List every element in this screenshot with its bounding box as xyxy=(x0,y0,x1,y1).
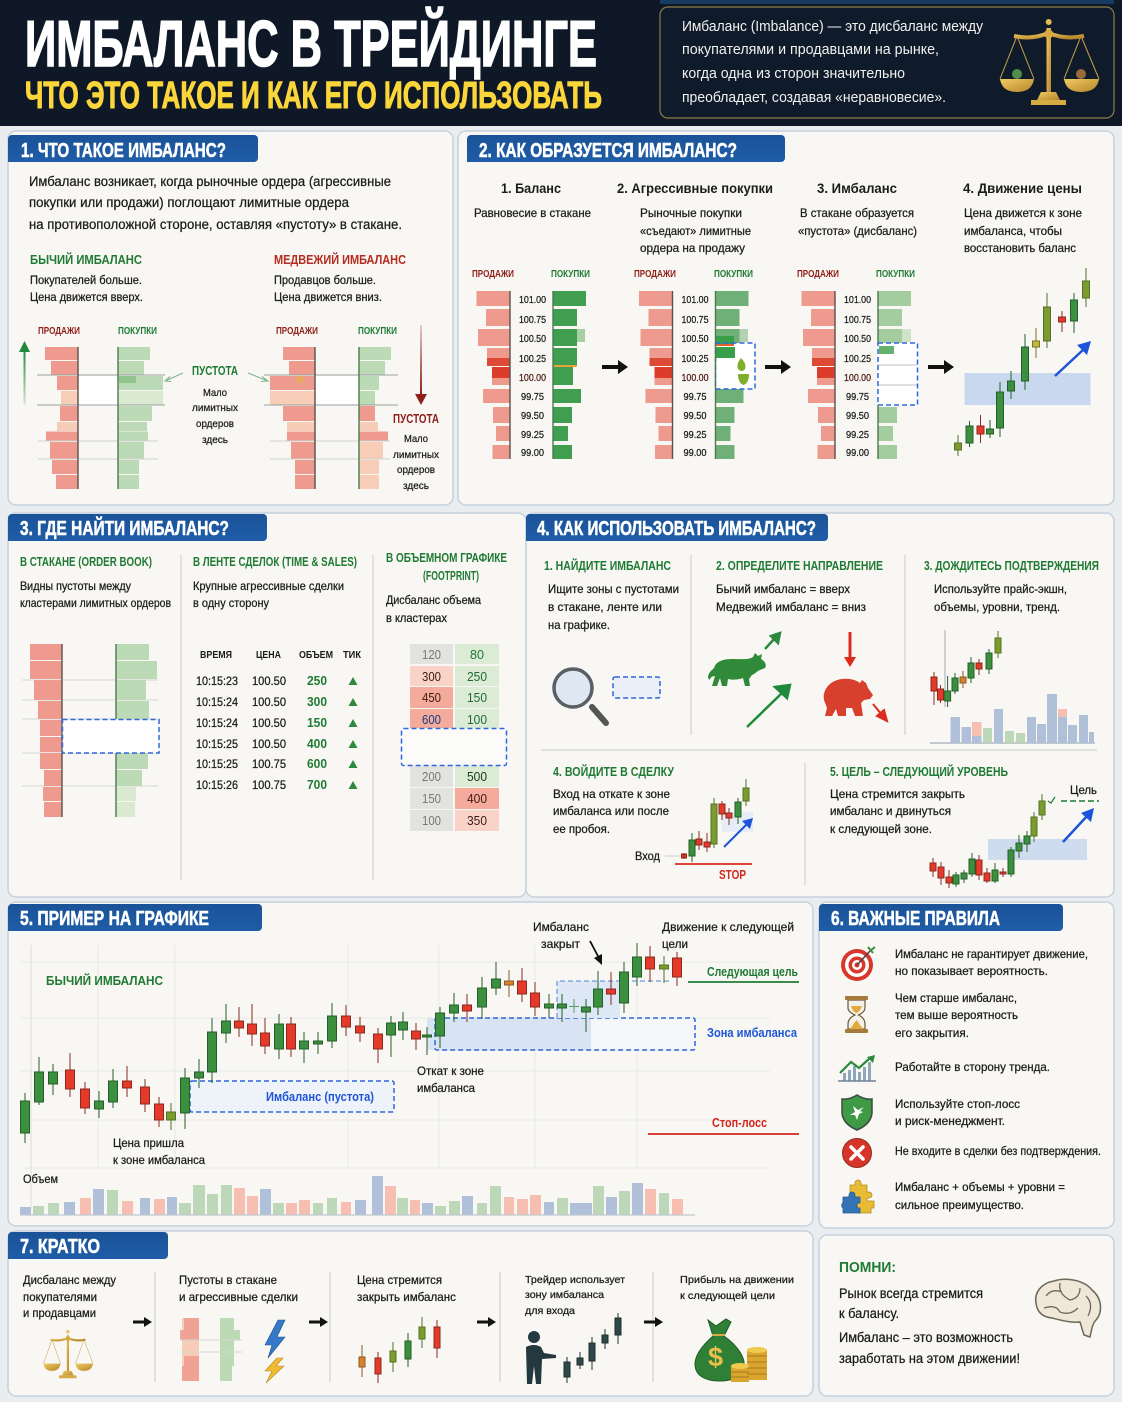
arrow xyxy=(765,360,791,374)
annotation: closed xyxy=(533,920,602,965)
rule 2: тем выше вероятность xyxy=(895,1008,1018,1022)
ladder 2: aggressive buys: 99.25 xyxy=(684,429,707,441)
arrow xyxy=(477,1317,496,1327)
title: ИМБАЛАНС В ТРЕЙДИНГЕ xyxy=(25,7,597,80)
footprint table: 300 xyxy=(422,670,441,684)
mini order book xyxy=(180,1318,242,1381)
footprint table: 100 xyxy=(467,713,487,727)
column 2 text: Крупные агрессивные сделки xyxy=(193,579,344,593)
column 2 text: В ЛЕНТЕ СДЕЛОК (TIME & SALES) xyxy=(193,555,357,569)
arrow xyxy=(133,1317,152,1327)
step 4 enter: Вход на откате к зоне xyxy=(553,787,670,801)
step 2 text: Рыночные покупки xyxy=(640,206,742,220)
void label green xyxy=(165,364,268,446)
step 2 direction xyxy=(708,559,887,727)
void label red: здесь xyxy=(403,480,429,492)
step 3 text: «пустота» (дисбаланс) xyxy=(798,224,917,238)
annotation: price reached zone: Цена пришла xyxy=(113,1136,184,1150)
ladder 3: imbalance: 101.00 xyxy=(844,294,871,306)
void label green: Мало xyxy=(203,387,227,399)
summary 3 xyxy=(357,1273,456,1383)
step 4 enter: 4. ВОЙДИТЕ В СДЕЛКУ xyxy=(553,764,674,779)
footprint table: 350 xyxy=(467,814,487,828)
summary 2: Пустоты в стакане xyxy=(179,1273,277,1287)
step 4 enter: Вход xyxy=(635,849,660,863)
summary 4: зону имбаланса xyxy=(525,1289,604,1301)
column 3 text: В ОБЪЕМНОМ ГРАФИКЕ xyxy=(386,551,507,565)
arrow xyxy=(309,1317,328,1327)
step 1 text: 1. Баланс xyxy=(501,181,561,196)
arrow down xyxy=(415,325,427,405)
void label red xyxy=(393,412,440,492)
ladder 3: imbalance: 99.75 xyxy=(846,391,869,403)
summary 1 xyxy=(23,1273,116,1378)
ladder 2: aggressive buys: 101.00 xyxy=(682,294,709,306)
annotation: move to next target: цели xyxy=(662,937,688,951)
icon: puzzle xyxy=(842,1180,874,1213)
time and sales table: ТИК xyxy=(343,650,362,661)
step 4 text: имбаланса, чтобы xyxy=(964,224,1062,238)
step 2 text: 2. Агрессивные покупки xyxy=(617,181,773,196)
summary 5 xyxy=(680,1274,794,1382)
imbalance void zone: Имбаланс (пустота) xyxy=(266,1090,374,1104)
ladder 3: imbalance: 100.75 xyxy=(844,314,871,326)
mini candles xyxy=(359,1317,440,1383)
time and sales table: ЦЕНА xyxy=(256,650,281,661)
heading 5: 5. ПРИМЕР НА ГРАФИКЕ xyxy=(20,908,209,930)
bullish imbalance text xyxy=(30,252,143,304)
time and sales table: 100.50 xyxy=(252,674,286,688)
step 2 direction: 2. ОПРЕДЕЛИТЕ НАПРАВЛЕНИЕ xyxy=(716,559,883,573)
icon: target xyxy=(841,947,875,981)
rule 4: Используйте стоп-лосс xyxy=(895,1097,1020,1111)
bearish order book xyxy=(264,326,398,489)
time and sales table: 100.75 xyxy=(252,757,286,771)
step 1 text xyxy=(474,181,591,220)
icon: trend chart xyxy=(838,1055,876,1081)
step 5 target: 5. ЦЕЛЬ – СЛЕДУЮЩИЙ УРОВЕНЬ xyxy=(830,764,1008,779)
annotation: closed: Имбаланс xyxy=(533,920,589,934)
summary 1: Дисбаланс между xyxy=(23,1273,116,1287)
ladder 2: aggressive buys: ПРОДАЖИ xyxy=(634,269,676,280)
footprint table xyxy=(402,644,506,831)
footprint table: 120 xyxy=(422,648,441,662)
icon: cross xyxy=(842,1138,872,1168)
entry chart xyxy=(665,779,753,864)
summary 5: Прибыль на движении xyxy=(680,1274,794,1286)
step 1 find: в стакане, ленте или xyxy=(548,600,662,614)
ladder 1: balance: 100.50 xyxy=(519,333,546,345)
summary 3: закрыть имбаланс xyxy=(357,1290,456,1304)
rule 5 xyxy=(842,1138,1101,1168)
remember text xyxy=(839,1286,1020,1366)
time and sales table: 10:15:24 xyxy=(196,695,238,709)
footprint table: 100 xyxy=(422,814,441,828)
annotation: closed: закрыт xyxy=(541,937,581,951)
stop loss: Стоп-лосс xyxy=(712,1116,767,1130)
step 3 text xyxy=(798,181,917,238)
rule 3 xyxy=(838,1055,1050,1081)
ladder 1: balance: ПОКУПКИ xyxy=(551,269,590,280)
ladder 3: imbalance: 99.25 xyxy=(846,429,869,441)
icon: golden scales xyxy=(1000,19,1099,105)
step 4 enter: ее пробоя. xyxy=(553,822,610,836)
summary 4: Трейдер использует xyxy=(525,1274,625,1286)
step 3 confirmation: Используйте прайс-экшн, xyxy=(934,582,1067,596)
intro text xyxy=(29,174,402,232)
annotation: move to next target: Движение к следующей xyxy=(662,920,794,934)
bullish order book: ПОКУПКИ xyxy=(118,326,157,337)
rule 3: Работайте в сторону тренда. xyxy=(895,1060,1050,1074)
icon: magnifier xyxy=(554,669,606,723)
summary 1: и продавцами xyxy=(23,1306,96,1320)
bullish imbalance text: Цена движется вверх. xyxy=(30,290,143,304)
footprint table: 150 xyxy=(422,792,441,806)
ladder 2: aggressive buys: 99.00 xyxy=(684,447,707,459)
void label green: ордеров xyxy=(196,418,234,430)
volume chart xyxy=(20,1172,695,1215)
time and sales table: 10:15:25 xyxy=(196,737,238,751)
remember text: Имбаланс – это возможность xyxy=(839,1330,1013,1345)
footprint table: 80 xyxy=(470,648,484,662)
bullish imbalance text: Покупателей больше. xyxy=(30,273,142,287)
step 4 enter: имбаланса или после xyxy=(553,804,669,818)
footprint table: 450 xyxy=(422,691,441,705)
ladder 3: imbalance: 99.00 xyxy=(846,447,869,459)
column 3 text xyxy=(386,551,507,625)
imbalance zone xyxy=(427,1018,798,1050)
time and sales table: ОБЪЕМ xyxy=(299,650,333,661)
rule 4 xyxy=(842,1095,1020,1130)
imbalance void zone xyxy=(190,1081,394,1112)
arrow up xyxy=(19,341,30,405)
bearish imbalance text xyxy=(274,252,406,304)
icon: shield xyxy=(842,1095,872,1130)
ladder 3: imbalance xyxy=(797,269,918,459)
order book with void xyxy=(22,644,159,817)
icon: money bag: $ xyxy=(708,1342,723,1372)
summary 2: и агрессивные сделки xyxy=(179,1290,298,1304)
footprint table: 200 xyxy=(422,770,441,784)
time and sales table: 700 xyxy=(307,778,327,792)
time and sales table: 10:15:24 xyxy=(196,716,238,730)
heading 3: 3. ГДЕ НАЙТИ ИМБАЛАНС? xyxy=(20,516,229,540)
ladder 1: balance: 99.75 xyxy=(521,391,544,403)
ladder 1: balance xyxy=(472,269,590,459)
step 4 text xyxy=(963,181,1082,255)
annotation: pullback: имбаланса xyxy=(417,1081,475,1095)
step 4 enter: STOP xyxy=(719,868,746,882)
time and sales table: 100.50 xyxy=(252,716,286,730)
arrow down red xyxy=(844,632,856,667)
step 3 text: 3. Имбаланс xyxy=(817,181,897,196)
ladder 2: aggressive buys: 100.00 xyxy=(682,372,709,384)
panel 2: how imbalance forms xyxy=(458,131,1114,505)
footprint table: 500 xyxy=(467,770,487,784)
rule 4: и риск-менеджмент. xyxy=(895,1114,1005,1128)
ladder 1: balance: 99.50 xyxy=(521,410,544,422)
time and sales table: ВРЕМЯ xyxy=(200,650,232,661)
arrow xyxy=(928,360,954,374)
time and sales table: 100.50 xyxy=(252,695,286,709)
step 4 text: Цена движется к зоне xyxy=(964,206,1082,220)
void label red: ордеров xyxy=(397,464,435,476)
rule 2 xyxy=(845,991,1018,1040)
void label red: ПУСТОТА xyxy=(393,412,439,426)
bullish order book xyxy=(37,326,165,489)
ladder 1: balance: 100.00 xyxy=(519,372,546,384)
definition callout: Имбаланс (Imbalance) — это дисбаланс между xyxy=(682,18,983,35)
time and sales table: 10:15:25 xyxy=(196,757,238,771)
step 2 text xyxy=(617,181,773,255)
step 1 find xyxy=(544,558,679,723)
annotation: price reached zone: к зоне имбаланса xyxy=(113,1153,205,1167)
dark candles xyxy=(564,1313,621,1383)
icon: lightning xyxy=(265,1320,285,1383)
time and sales table: 300 xyxy=(307,695,327,709)
chart label: БЫЧИЙ ИМБАЛАНС xyxy=(46,973,163,988)
summary 2 xyxy=(179,1273,298,1383)
bullish order book: ПРОДАЖИ xyxy=(38,326,80,337)
ladder 1: balance: 101.00 xyxy=(519,294,546,306)
bullish imbalance text: БЫЧИЙ ИМБАЛАНС xyxy=(30,252,142,267)
footprint table: 600 xyxy=(422,713,441,727)
footprint table: 150 xyxy=(467,691,487,705)
heading 1: 1. ЧТО ТАКОЕ ИМБАЛАНС? xyxy=(21,140,226,162)
step 1 text: Равновесие в стакане xyxy=(474,206,591,220)
time and sales table: 10:15:23 xyxy=(196,674,238,688)
bearish imbalance text: Продавцов больше. xyxy=(274,273,376,287)
panel 4: how to use imbalance xyxy=(526,513,1114,897)
price move chart xyxy=(954,268,1091,456)
remember heading: ПОМНИ: xyxy=(839,1260,896,1276)
column 1 text: Видны пустоты между xyxy=(20,579,131,593)
next target zone xyxy=(557,965,799,1018)
time and sales table: 100.50 xyxy=(252,737,286,751)
intro text: на противоположной стороне, оставляя «пустоту» в стакане. xyxy=(29,217,402,232)
heading 6: 6. ВАЖНЫЕ ПРАВИЛА xyxy=(831,908,1000,930)
step 4 text: восстановить баланс xyxy=(964,241,1076,255)
ladder 3: imbalance: ПОКУПКИ xyxy=(876,269,915,280)
ladder 2: aggressive buys xyxy=(634,269,755,459)
rule 6: сильное преимущество. xyxy=(895,1198,1024,1212)
step 4 enter xyxy=(553,764,753,882)
panel 8: remember xyxy=(819,1235,1114,1396)
column 2 text xyxy=(193,555,357,610)
icon: small scales xyxy=(44,1330,93,1378)
remember text: к балансу. xyxy=(839,1306,899,1321)
panel 6: important rules xyxy=(819,902,1114,1228)
step 5 target: Цена стремится закрыть xyxy=(830,787,965,801)
void label green: лимитных xyxy=(192,402,239,414)
step 1 find: 1. НАЙДИТЕ ИМБАЛАНС xyxy=(544,558,671,573)
column 2 text: в одну сторону xyxy=(193,596,269,610)
void label green: ПУСТОТА xyxy=(192,364,238,378)
step 1 find: на графике. xyxy=(548,618,610,632)
ladder 2: aggressive buys: 99.75 xyxy=(684,391,707,403)
rule 1: но показывает вероятность. xyxy=(895,964,1048,978)
remember text: Рынок всегда стремится xyxy=(839,1286,983,1301)
intro text: покупки или продажи) поглощают лимитные ордера xyxy=(29,195,349,210)
step 2 text: «съедают» лимитные xyxy=(640,224,751,238)
panel 5: example on chart xyxy=(8,902,813,1226)
step 3 text: В стакане образуется xyxy=(800,206,914,220)
panel 3: where to find imbalance xyxy=(8,513,526,897)
annotation: price reached zone xyxy=(113,1136,205,1167)
step 4 text: 4. Движение цены xyxy=(963,181,1082,196)
subtitle: ЧТО ЭТО ТАКОЕ И КАК ЕГО ИСПОЛЬЗОВАТЬ xyxy=(25,75,602,117)
step 5 target xyxy=(830,764,1099,888)
rule 2: Чем старше имбаланс, xyxy=(895,991,1017,1005)
void label red: лимитных xyxy=(393,449,440,461)
ladder 1: balance: ПРОДАЖИ xyxy=(472,269,514,280)
imbalance zone: Зона имбаланса xyxy=(707,1026,798,1040)
icon: brain xyxy=(1036,1279,1101,1337)
coins xyxy=(731,1347,767,1382)
rule 6: Имбаланс + объемы + уровни = xyxy=(895,1180,1065,1194)
column 1 text: кластерами лимитных ордеров xyxy=(20,596,171,610)
arrow up large xyxy=(747,685,790,727)
rule 1: Имбаланс не гарантирует движение, xyxy=(895,947,1088,961)
step 3 confirmation xyxy=(924,559,1099,743)
bearish imbalance text: МЕДВЕЖИЙ ИМБАЛАНС xyxy=(274,252,406,267)
heading 2: 2. КАК ОБРАЗУЕТСЯ ИМБАЛАНС? xyxy=(479,140,737,162)
summary 5: к следующей цели xyxy=(680,1290,775,1302)
summary 4 xyxy=(525,1274,625,1384)
rule 2: его закрытия. xyxy=(895,1026,969,1040)
heading 1 xyxy=(8,135,258,162)
definition callout: когда одна из сторон значительно xyxy=(682,65,905,82)
header banner xyxy=(0,0,1122,126)
bearish imbalance text: Цена движется вниз. xyxy=(274,290,382,304)
icon: bull xyxy=(708,653,766,686)
step 1 find: Ищите зоны с пустотами xyxy=(548,582,679,596)
heading 7 xyxy=(8,1232,168,1259)
intro text: Имбаланс возникает, когда рыночные ордера (агрессивные xyxy=(29,174,391,189)
column 1 text: В СТАКАНЕ (ORDER BOOK) xyxy=(20,555,152,569)
time and sales table: 600 xyxy=(307,757,327,771)
summary 3: Цена стремится xyxy=(357,1273,442,1287)
column 3 text: Дисбаланс объема xyxy=(386,593,481,607)
void label green: здесь xyxy=(202,434,228,446)
ladder 2: aggressive buys: 100.75 xyxy=(682,314,709,326)
column 3 text: в кластерах xyxy=(386,611,447,625)
ladder 1: balance: 100.25 xyxy=(519,353,546,365)
ladder 3: imbalance: 100.50 xyxy=(844,333,871,345)
step 2 direction: Бычий имбаланс = вверх xyxy=(716,582,850,596)
icon: bear xyxy=(824,679,873,716)
remember text: заработать на этом движении! xyxy=(839,1351,1020,1366)
icon: hourglass xyxy=(845,996,868,1033)
ladder 2: aggressive buys: 99.50 xyxy=(684,410,707,422)
candlestick chart xyxy=(20,943,682,1143)
ladder 2: aggressive buys: 100.25 xyxy=(682,353,709,365)
heading 4 xyxy=(526,514,828,541)
step 2 direction: Медвежий имбаланс = вниз xyxy=(716,600,866,614)
bearish order book: ПРОДАЖИ xyxy=(276,326,318,337)
next target zone: Следующая цель xyxy=(707,965,798,979)
arrow xyxy=(644,1317,663,1327)
rule 1 xyxy=(841,947,1088,981)
candles and volume xyxy=(930,630,1095,743)
volume chart: Объем xyxy=(23,1172,58,1186)
time and sales table: 250 xyxy=(307,674,327,688)
step 5 target: Цель xyxy=(1070,783,1097,797)
void label red: Мало xyxy=(404,433,428,445)
definition callout: преобладает, создавая «неравновесие». xyxy=(682,89,946,106)
ladder 2: aggressive buys: ПОКУПКИ xyxy=(714,269,753,280)
rule 6 xyxy=(842,1180,1065,1213)
ladder 2: aggressive buys: 100.50 xyxy=(682,333,709,345)
arrow up small xyxy=(765,633,780,649)
time and sales table: 400 xyxy=(307,737,327,751)
definition callout xyxy=(660,7,1114,118)
time and sales table: 10:15:26 xyxy=(196,778,238,792)
panel 7: summary xyxy=(8,1231,813,1396)
time and sales table: 150 xyxy=(307,716,327,730)
step 5 target: имбаланс и двинуться xyxy=(830,804,951,818)
ladder 1: balance: 100.75 xyxy=(519,314,546,326)
annotation: pullback: Откат к зоне xyxy=(417,1064,484,1078)
bearish order book: ПОКУПКИ xyxy=(358,326,397,337)
ladder 1: balance: 99.00 xyxy=(521,447,544,459)
summary 4: для входа xyxy=(525,1305,575,1317)
step 3 confirmation: объемы, уровни, тренд. xyxy=(934,600,1060,614)
ladder 3: imbalance: ПРОДАЖИ xyxy=(797,269,839,280)
footprint table: 400 xyxy=(467,792,487,806)
summary 1: покупателями xyxy=(23,1290,97,1304)
column 1 text xyxy=(20,555,171,610)
heading 4: 4. КАК ИСПОЛЬЗОВАТЬ ИМБАЛАНС? xyxy=(537,518,816,540)
arrow xyxy=(602,360,628,374)
footprint table: 250 xyxy=(467,670,487,684)
heading 7: 7. КРАТКО xyxy=(20,1236,100,1258)
panel 1: what is imbalance xyxy=(8,131,453,505)
annotation: pullback xyxy=(417,1064,484,1095)
step 5 target: к следующей зоне. xyxy=(830,822,932,836)
ladder 3: imbalance: 100.25 xyxy=(844,353,871,365)
ladder 1: balance: 99.25 xyxy=(521,429,544,441)
dashed zone xyxy=(613,677,660,698)
step 2 text: ордера на продажу xyxy=(640,241,745,255)
ladder 3: imbalance: 100.00 xyxy=(844,372,871,384)
annotation: move to next target xyxy=(662,920,794,951)
ladder 3: imbalance: 99.50 xyxy=(846,410,869,422)
target chart xyxy=(930,794,1099,888)
rule 5: Не входите в сделки без подтверждения. xyxy=(895,1144,1101,1158)
column 3 text: (FOOTPRINT) xyxy=(423,569,479,583)
time and sales table xyxy=(196,650,362,792)
definition callout: покупателями и продавцами на рынке, xyxy=(682,41,939,58)
icon: trader xyxy=(526,1331,556,1384)
arrow down small xyxy=(873,704,887,721)
time and sales table: 100.75 xyxy=(252,778,286,792)
